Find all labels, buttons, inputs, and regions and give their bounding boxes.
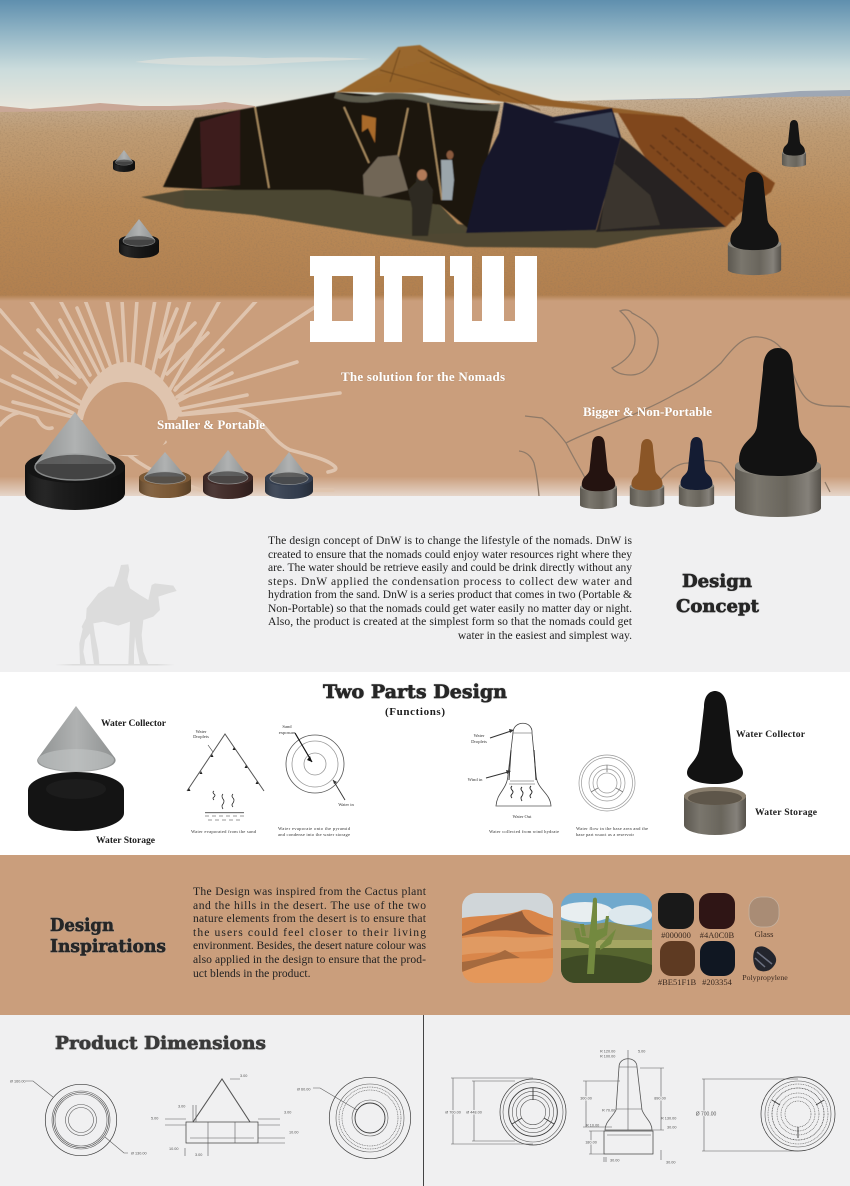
product: tan portable cone (139, 452, 191, 498)
diagram: pyramid condensation: Water evaporated from the sand (191, 829, 257, 834)
diagram: bottle wind hydrate: Water Out (513, 814, 532, 819)
far hills right (600, 90, 850, 100)
drawing: big product side view: 5.00 (638, 1050, 645, 1054)
product: large bottle (735, 348, 821, 517)
diagram: bottle wind hydrate (468, 723, 559, 834)
inspiration paragraph: uct blends in the product. (193, 967, 311, 980)
heading: design inspirations: Design (50, 915, 114, 936)
drawing: big base top view: Ø 700.00 (445, 1110, 461, 1114)
swatch: brown (658, 941, 696, 987)
heading: design inspirations: Inspirations (50, 936, 166, 957)
label: water collector right: Water Collector (736, 729, 806, 740)
swatch: navy (700, 941, 735, 987)
drawing: big product side view: 890.00 (654, 1096, 666, 1100)
swatch: black (658, 893, 694, 940)
hero product: small cone far (113, 150, 135, 172)
drawing: small base top view: Ø 130.00 (131, 1152, 147, 1156)
inspiration paragraph: environment. Besides, the desert nature colour was (193, 939, 426, 952)
inspiration background (0, 855, 850, 1015)
diagram: bottle wind hydrate: Water (474, 733, 485, 738)
panel: tan product band (0, 300, 850, 496)
product: orange bottle (630, 439, 664, 507)
panel: design concept (0, 496, 850, 672)
concept paragraph: hydration from the sand. DnW is a series product that comes in two (Portable & (268, 588, 632, 601)
drawing: big collector top view: Ø 700.00 (696, 1112, 717, 1118)
drawing: small product side view: 3.00 (284, 1110, 291, 1114)
product: dark brown bottle (580, 436, 617, 509)
band background (0, 301, 850, 496)
right roof flap (618, 113, 775, 227)
second child (441, 160, 454, 200)
drawing: big product side view: 300.00 (580, 1096, 592, 1100)
heading: design inspirations (50, 915, 166, 957)
drawing: small product side view: 3.00 (240, 1074, 247, 1078)
tent shaded floor (184, 190, 466, 235)
panel: product dimensions (0, 1015, 850, 1186)
photo: desert dunes (462, 893, 553, 983)
drawing: big product side view: R 120.00 (600, 1050, 615, 1054)
exploded big product (684, 691, 746, 835)
camel silhouette (55, 564, 177, 666)
material: glass (749, 897, 779, 939)
hanging cloth (362, 115, 376, 143)
far hills left (0, 102, 255, 112)
product: large portable cone (25, 412, 125, 510)
diagram: circular top view: Water in (338, 802, 354, 807)
drawing: small base top view: Ø 160.00 (10, 1080, 26, 1084)
drawing: big product side view (580, 1050, 677, 1164)
drawing: big collector top view (696, 1077, 835, 1151)
panel: two parts design (0, 672, 850, 855)
tent side wall (596, 137, 726, 232)
drawing: small product side view: 10.00 (289, 1130, 299, 1134)
blue tarp (466, 102, 621, 233)
concept paragraph: are. The water should be retrieve easily and could be drink directly without any (268, 561, 632, 574)
diagram: circular top view: and condense into the water storage (278, 832, 350, 837)
inspiration paragraph: the users could feel closer to their living (193, 926, 426, 939)
swatch: navy: #203354 (702, 977, 733, 987)
hero product: bottle far (782, 120, 806, 167)
label: water collector left: Water Collector (101, 718, 167, 729)
sun illustration (0, 300, 340, 490)
sand texture (0, 96, 850, 296)
product: wine portable cone (203, 450, 253, 499)
diagram: circular top view: Water evaporate onto the pyramid (278, 826, 351, 831)
label: water storage right: Water Storage (755, 807, 818, 818)
heading: design concept: Design (682, 571, 752, 592)
water collector cone (37, 706, 116, 772)
swatch: wine (699, 893, 735, 940)
inspiration paragraph: and the hills in the desert. The use of the two (193, 899, 426, 912)
heading: product dimensions: Product Dimensions (55, 1033, 266, 1054)
diagram: pyramid condensation: Water (196, 729, 207, 734)
red curtain (200, 110, 240, 188)
concept paragraph: Also, the product is created at the simplest form so that the nomads could get (268, 615, 633, 628)
heading: design concept (676, 571, 760, 617)
panel: lower-band products (25, 348, 821, 517)
concept paragraph: created to ensure that the nomads could enjoy water resources right where they (268, 548, 632, 561)
diagram: pyramid condensation (187, 729, 264, 834)
crescent moon (612, 310, 658, 375)
drawing: big product side view: 30.00 (666, 1160, 676, 1164)
drawing: small product side view: 10.00 (169, 1147, 179, 1151)
DnW logo (310, 256, 537, 342)
product: navy portable cone (265, 452, 313, 499)
inspiration paragraph: nature elements from the desert is to ensure that (193, 912, 427, 925)
tent valance (334, 92, 500, 111)
concept paragraph: Non-Portable) so that the nomads could get water easily no matter day or night. (268, 602, 632, 615)
drawing: big product side view: R 10.00 (586, 1124, 599, 1128)
roof peak (336, 45, 683, 150)
diagram: circular top view (278, 724, 354, 837)
child standing (408, 172, 433, 236)
tent dark body (163, 92, 500, 230)
diagram: base reservoir top view: Water flow in the base area and the (576, 826, 648, 831)
sand ground (0, 96, 850, 301)
drawing: big product side view: R 70.00 (602, 1108, 615, 1112)
inspiration paragraph: The Design was inspired from the Cactus plant (193, 885, 427, 898)
drawing: small product side view: 3.00 (178, 1104, 185, 1108)
panel: design inspirations (0, 855, 850, 1015)
concept background (0, 496, 850, 672)
hill outlines (519, 337, 850, 496)
drawing: big product side view: 30.00 (667, 1126, 677, 1130)
water storage ring (28, 772, 124, 831)
drawing: big product side view: 180.00 (585, 1140, 597, 1144)
subheading: functions: (Functions) (385, 706, 445, 718)
functions background (0, 672, 850, 855)
hero product: small cone near (119, 219, 159, 258)
swatch: wine: #4A0C0B (700, 930, 735, 940)
diagram: circular top view: Sand (282, 724, 292, 729)
heading: design concept: Concept (676, 596, 760, 617)
product: navy bottle (679, 437, 714, 507)
drawing: small product side view: 5.00 (151, 1116, 158, 1120)
diagram: bottle wind hydrate: Wind in (468, 777, 483, 782)
water collector bottle (687, 691, 743, 784)
concept paragraph (268, 534, 633, 642)
drawing: small cone top view (297, 1077, 411, 1159)
swatch: brown: #BE51F1B (658, 977, 696, 987)
drawing: small base top view (10, 1080, 147, 1156)
diagram: bottle wind hydrate: Water collected from wind hydrate (489, 829, 559, 834)
concept paragraph: The design concept of DnW is to change the lifestyle of the nomads. DnW is (268, 534, 632, 547)
drawing: small product side view: 3.00 (195, 1153, 202, 1157)
tent poles (255, 103, 442, 200)
diagram: base reservoir top view (576, 755, 648, 837)
concept paragraph: steps. DnW applied the condensation process to collect dew water and (268, 575, 632, 588)
material: polypropylene: Polypropylene (742, 973, 788, 982)
drawing: big product side view: R 130.00 (661, 1116, 676, 1120)
clouds (135, 57, 372, 66)
inspiration paragraph: also applied in the design to ensure that the prod- (193, 953, 426, 966)
panel: hero desert photo (0, 0, 850, 301)
label: water storage left: Water Storage (96, 835, 156, 846)
sky (0, 0, 850, 112)
tent (141, 45, 775, 248)
striped blanket (363, 155, 408, 197)
diagram: circular top view: exposure (279, 730, 295, 735)
drawing: small cone top view: Ø 60.00 (297, 1088, 311, 1092)
subtitle: The solution for the Nomads (341, 369, 505, 384)
drawing: big product side view: 30.00 (610, 1158, 620, 1162)
diagram: bottle wind hydrate: Droplets (471, 739, 487, 744)
diagram: base reservoir top view: base part wuact as a reservoir (576, 832, 634, 837)
photo: saguaro cactus (557, 893, 652, 983)
inspiration paragraph (193, 885, 427, 980)
dimensions background (0, 1015, 850, 1186)
label: smaller and portable: Smaller & Portable (157, 417, 265, 432)
material: polypropylene (742, 946, 788, 982)
drawing: big base top view (445, 1078, 566, 1145)
drawing: big base top view: Ø 448.00 (466, 1110, 482, 1114)
water storage ring (684, 795, 746, 835)
hero product: bottle near (728, 172, 781, 275)
swatch: black: #000000 (661, 930, 691, 940)
exploded small product (28, 706, 124, 831)
tent ground shadow (141, 190, 726, 248)
drawing: small product side view (151, 1074, 299, 1157)
sun disc (83, 382, 168, 455)
concept paragraph: water in the easiest and simplest way. (458, 629, 632, 642)
heading: two parts design: Two Parts Design (323, 681, 507, 703)
label: bigger and non-portable: Bigger & Non-Portable (583, 404, 712, 419)
diagram: pyramid condensation: Droplets (193, 734, 209, 739)
material: glass: Glass (755, 929, 773, 939)
drawing: big product side view: R 100.00 (600, 1054, 615, 1058)
